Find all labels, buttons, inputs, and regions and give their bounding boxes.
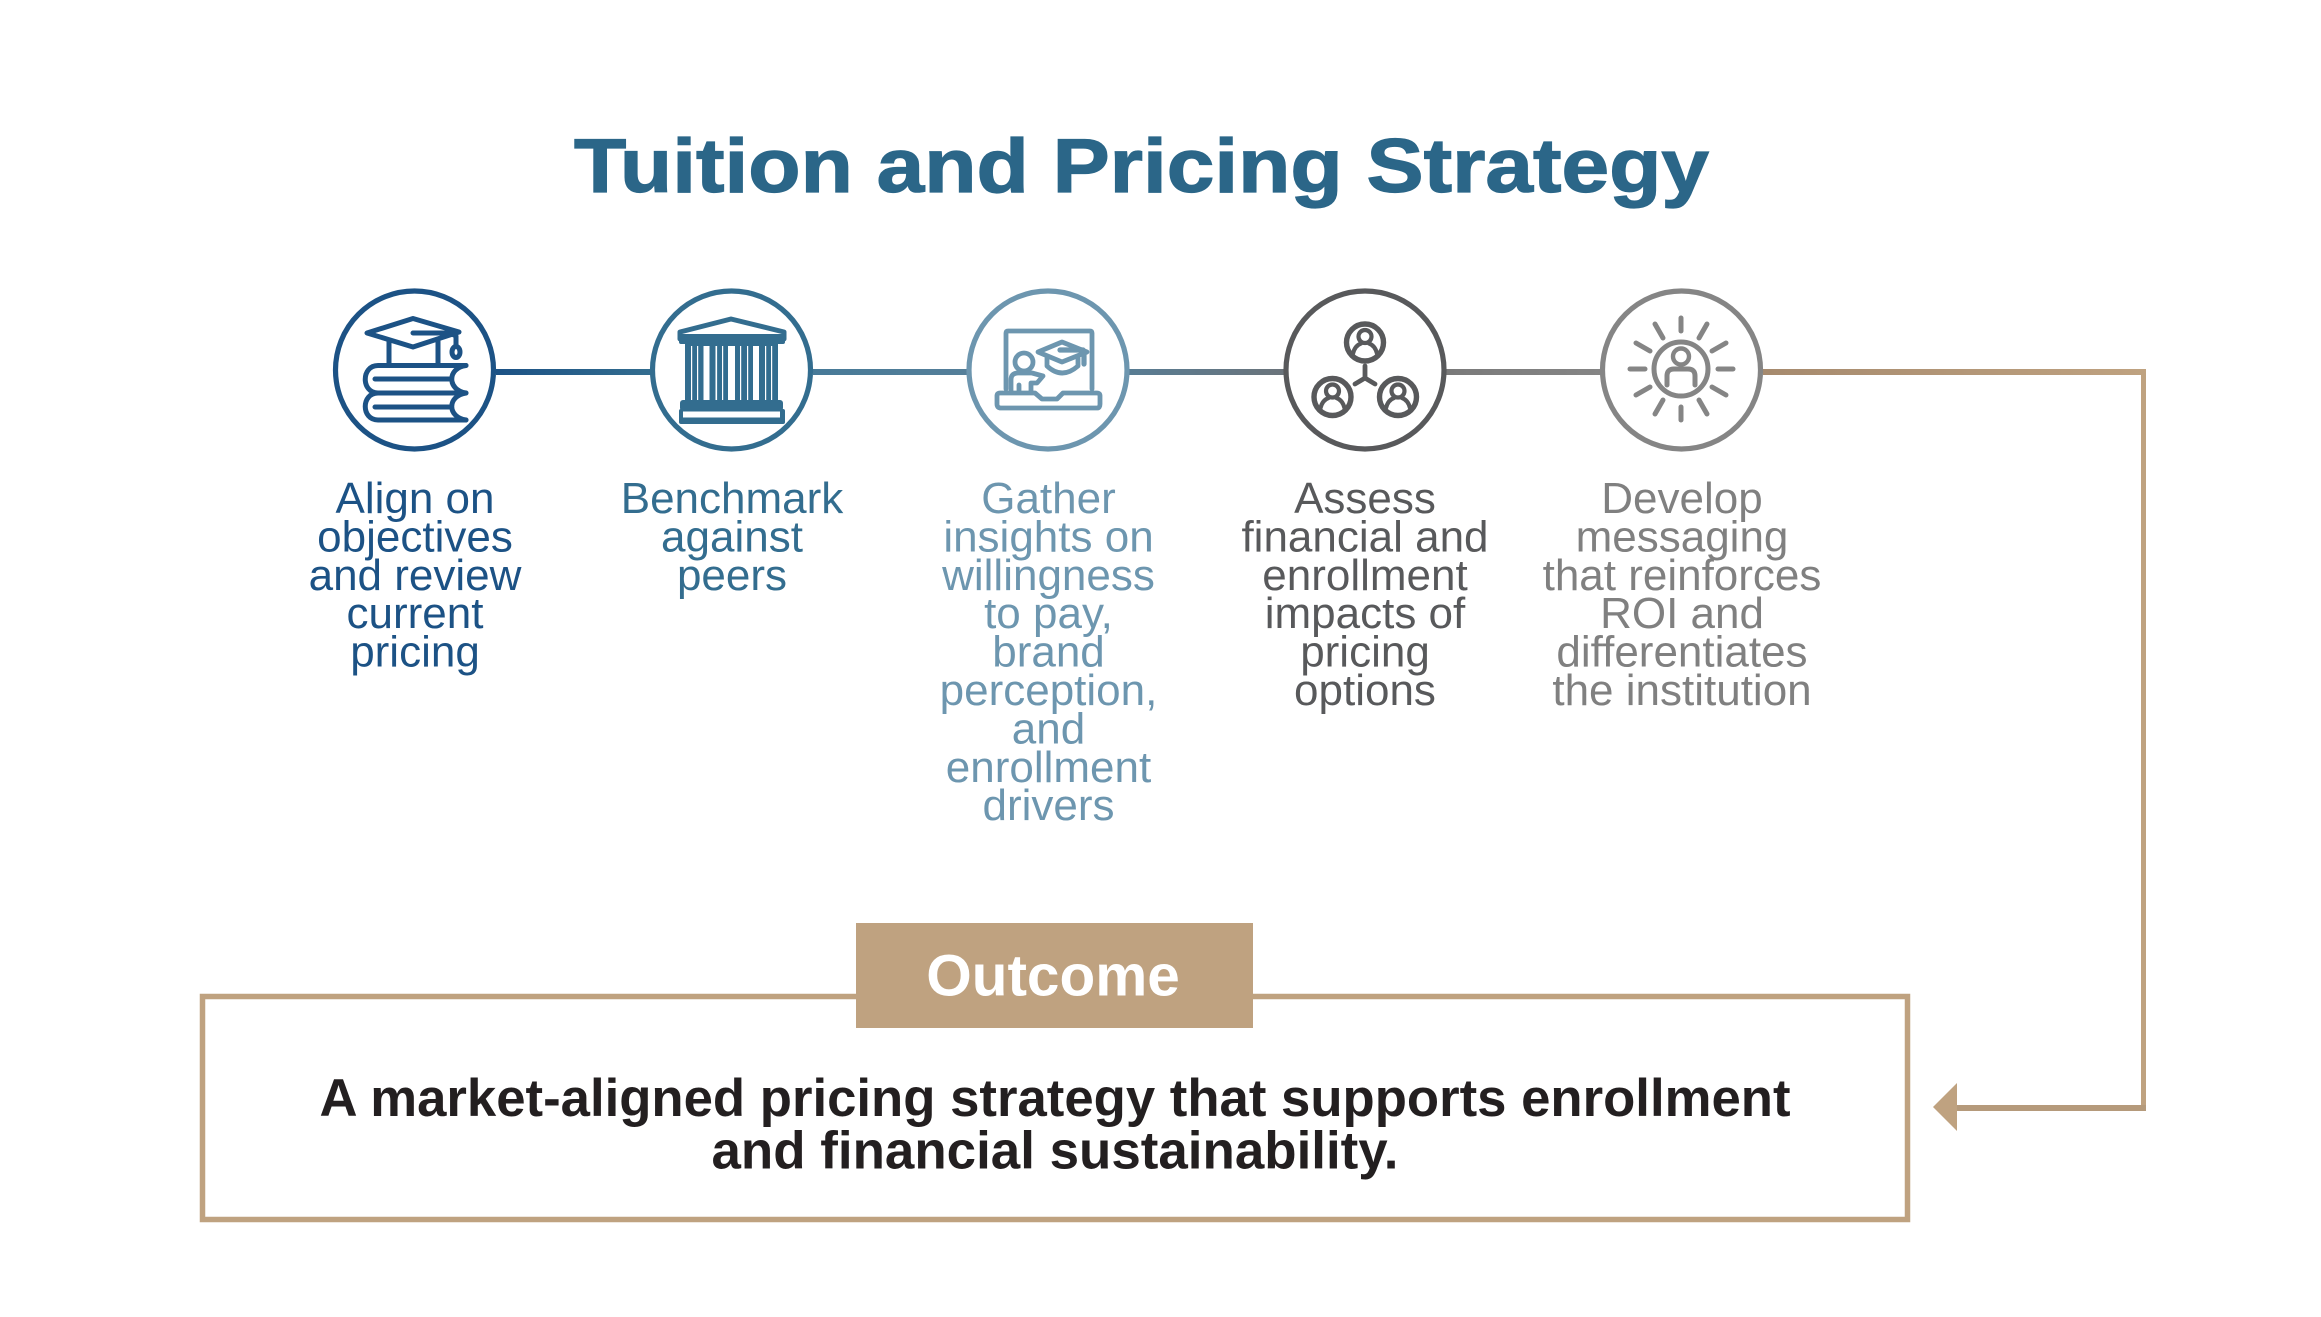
label: gather insights: enrollment xyxy=(946,743,1151,792)
outcome box outline xyxy=(202,996,1908,1220)
icon: three connected people xyxy=(1286,291,1444,449)
outcome tab xyxy=(856,923,1253,1028)
label: gather insights: Gather xyxy=(981,474,1116,523)
outcome tab: Outcome xyxy=(926,944,1180,1008)
label: align on objectives: pricing xyxy=(350,628,480,677)
label: benchmark against peers: Benchmark xyxy=(621,474,844,523)
label: assess impacts: impacts of xyxy=(1265,589,1466,638)
label: gather insights: perception, xyxy=(940,666,1157,715)
label: align on objectives: current xyxy=(347,589,483,638)
label: benchmark against peers xyxy=(621,474,844,600)
icon: person with radiating rays xyxy=(1602,291,1760,449)
label: develop messaging: differentiates xyxy=(1556,628,1808,677)
label: develop messaging: Develop xyxy=(1601,474,1763,523)
icon: instructor at laptop with cap xyxy=(969,291,1127,449)
label: develop messaging xyxy=(1543,474,1821,715)
arrow: feedback from last step to outcome xyxy=(1763,369,2146,1131)
label: gather insights: and xyxy=(1012,704,1085,753)
step 5: develop messaging xyxy=(1543,291,1821,715)
label: align on objectives: Align on xyxy=(335,474,495,523)
label: gather insights: drivers xyxy=(982,781,1115,830)
label: assess impacts: options xyxy=(1294,666,1436,715)
label: develop messaging: that reinforces xyxy=(1543,551,1821,600)
label: assess impacts xyxy=(1241,474,1489,715)
label: develop messaging: ROI and xyxy=(1600,589,1764,638)
step 1: align on objectives xyxy=(309,291,522,677)
outcome statement xyxy=(320,1069,1790,1180)
label: assess impacts: enrollment xyxy=(1262,551,1468,600)
label: gather insights: to pay, xyxy=(984,589,1113,638)
label: develop messaging: the institution xyxy=(1552,666,1812,715)
label: align on objectives: and review xyxy=(309,551,522,600)
label: assess impacts: pricing xyxy=(1300,628,1430,677)
label: benchmark against peers: peers xyxy=(677,551,787,600)
label: benchmark against peers: against xyxy=(661,512,803,561)
label: gather insights: insights on xyxy=(943,512,1154,561)
title: Tuition and Pricing Strategy xyxy=(574,124,1709,209)
label: develop messaging: messaging xyxy=(1576,512,1788,561)
label: gather insights: brand xyxy=(992,628,1105,677)
step 4: assess impacts xyxy=(1241,291,1489,715)
icon: classical building xyxy=(652,291,810,449)
panel: outcome xyxy=(202,923,1908,1220)
icon: graduation cap on books xyxy=(336,291,494,449)
label: assess impacts: Assess xyxy=(1294,474,1436,523)
label: gather insights xyxy=(940,474,1157,830)
step 3: gather insights xyxy=(940,291,1157,830)
label: assess impacts: financial and xyxy=(1241,512,1489,561)
outcome statement: A market-aligned pricing strategy that supports enrollment xyxy=(320,1069,1790,1128)
step 2: benchmark against peers xyxy=(621,291,844,600)
label: align on objectives xyxy=(309,474,522,677)
label: align on objectives: objectives xyxy=(317,512,513,561)
connector lines between steps xyxy=(496,369,1601,375)
outcome statement: and financial sustainability. xyxy=(712,1122,1398,1180)
label: gather insights: willingness xyxy=(941,551,1155,600)
